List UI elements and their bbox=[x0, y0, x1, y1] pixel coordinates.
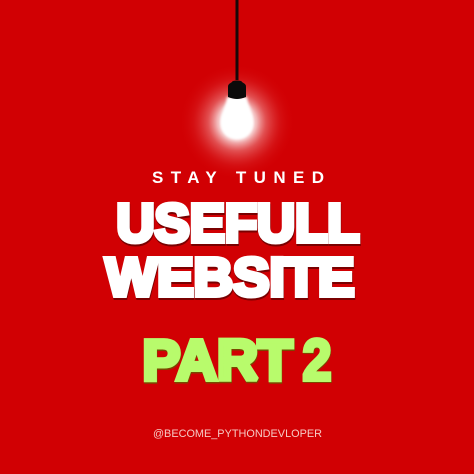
bulb glow bbox=[179, 64, 295, 180]
number shadow: 2 bbox=[303, 329, 332, 394]
part word: PART bbox=[142, 328, 293, 392]
cord bbox=[236, 0, 238, 80]
subheading: stay tuned: STAY TUNED bbox=[152, 168, 324, 187]
title line 1 shadow: USEFULL bbox=[117, 196, 360, 256]
icon: hanging light bulb bbox=[179, 0, 295, 180]
bulb glass bbox=[220, 97, 254, 140]
part shadow: PART bbox=[143, 330, 293, 394]
socket bbox=[228, 80, 246, 99]
title line 2 shadow: WEBSITE bbox=[106, 250, 355, 310]
part 2 label bbox=[142, 328, 332, 394]
title line 1: USEFULL bbox=[116, 194, 360, 254]
number 2: 2 bbox=[302, 328, 332, 393]
title: usefull website bbox=[106, 194, 360, 310]
title line 2: WEBSITE bbox=[106, 248, 354, 308]
handle: @BECOME_PYTHONDEVLOPER bbox=[153, 428, 322, 440]
